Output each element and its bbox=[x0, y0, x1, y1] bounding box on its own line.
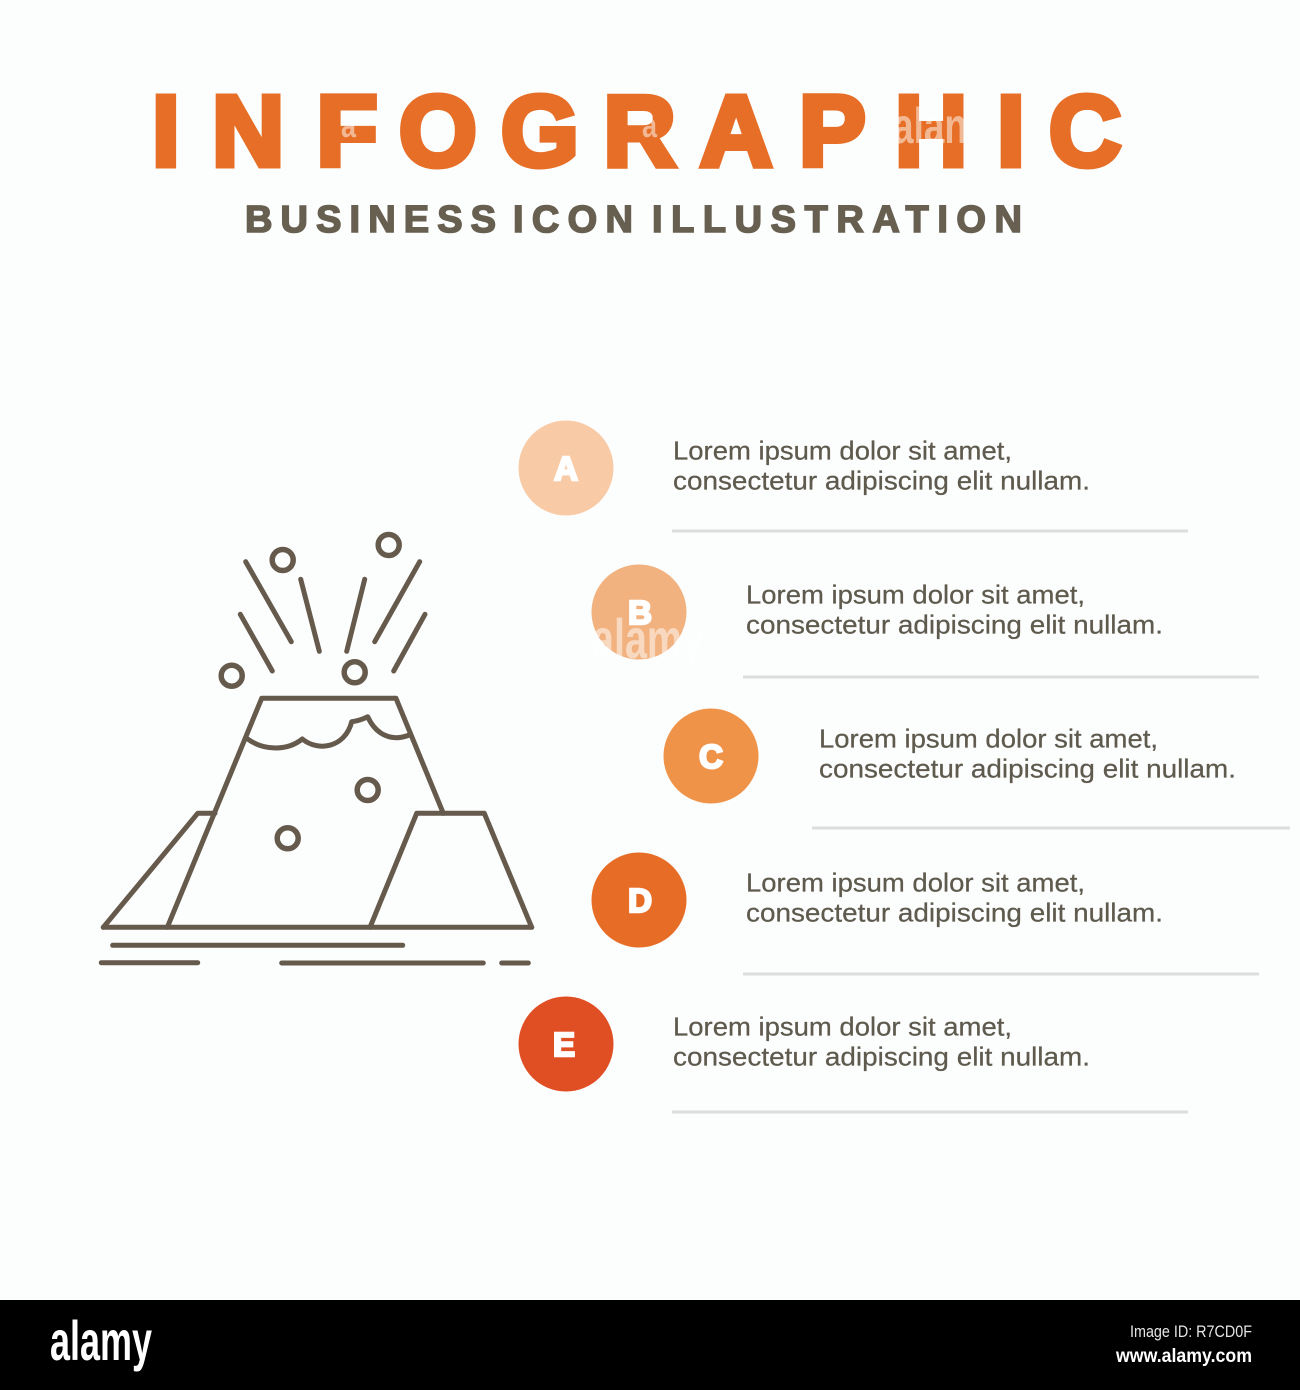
badge E bbox=[518, 996, 614, 1092]
step A bbox=[518, 420, 1188, 532]
text B: Lorem ipsum dolor sit amet, bbox=[746, 580, 1085, 610]
step E bbox=[518, 996, 1188, 1114]
icon: erupting volcano bbox=[101, 534, 532, 963]
lava flow bbox=[247, 717, 409, 748]
title: INFOGRAPHIC bbox=[152, 76, 1121, 188]
text B: consectetur adipiscing elit nullam. bbox=[746, 610, 1163, 640]
ground line bbox=[103, 925, 532, 930]
badge A bbox=[518, 420, 614, 516]
subtitle: ILLUSTRATION bbox=[652, 199, 1022, 241]
text A: Lorem ipsum dolor sit amet, bbox=[673, 436, 1012, 466]
watermarks: alamy bbox=[592, 607, 704, 670]
text A: consectetur adipiscing elit nullam. bbox=[673, 466, 1090, 496]
footer bar bbox=[0, 1300, 1300, 1390]
text C: Lorem ipsum dolor sit amet, bbox=[819, 724, 1158, 754]
text D: consectetur adipiscing elit nullam. bbox=[746, 898, 1163, 928]
letter A: A bbox=[554, 450, 578, 487]
letter C: C bbox=[699, 738, 723, 775]
right hill bbox=[370, 813, 532, 927]
badge D bbox=[592, 852, 686, 948]
text D: Lorem ipsum dolor sit amet, bbox=[746, 868, 1085, 898]
subtitle: BUSINESS bbox=[245, 199, 496, 241]
subtitle: ICON bbox=[513, 199, 633, 241]
step D bbox=[592, 852, 1259, 976]
left hill bbox=[103, 813, 215, 927]
watermarks: a bbox=[341, 107, 357, 145]
watermarks: alan bbox=[893, 98, 967, 154]
badge B bbox=[592, 564, 686, 660]
main volcano cone bbox=[167, 698, 443, 927]
letter B: B bbox=[628, 594, 652, 631]
badge C bbox=[664, 708, 758, 804]
text E: Lorem ipsum dolor sit amet, bbox=[673, 1012, 1012, 1042]
watermarks bbox=[341, 98, 967, 670]
letter E: E bbox=[553, 1026, 575, 1063]
step C bbox=[664, 708, 1290, 830]
image id: Image ID: R7CD0F bbox=[1130, 1322, 1252, 1341]
text C: consectetur adipiscing elit nullam. bbox=[819, 754, 1236, 784]
water lines bbox=[101, 945, 528, 963]
letter D: D bbox=[628, 882, 652, 919]
footer logo: alamy bbox=[50, 1309, 152, 1372]
subtitle bbox=[245, 199, 1022, 241]
website: www.alamy.com bbox=[1115, 1346, 1252, 1367]
text E: consectetur adipiscing elit nullam. bbox=[673, 1042, 1090, 1072]
eruption rays bbox=[240, 562, 425, 671]
lava rocks bbox=[221, 534, 399, 849]
step B bbox=[592, 564, 1259, 678]
watermarks: a bbox=[642, 107, 658, 145]
